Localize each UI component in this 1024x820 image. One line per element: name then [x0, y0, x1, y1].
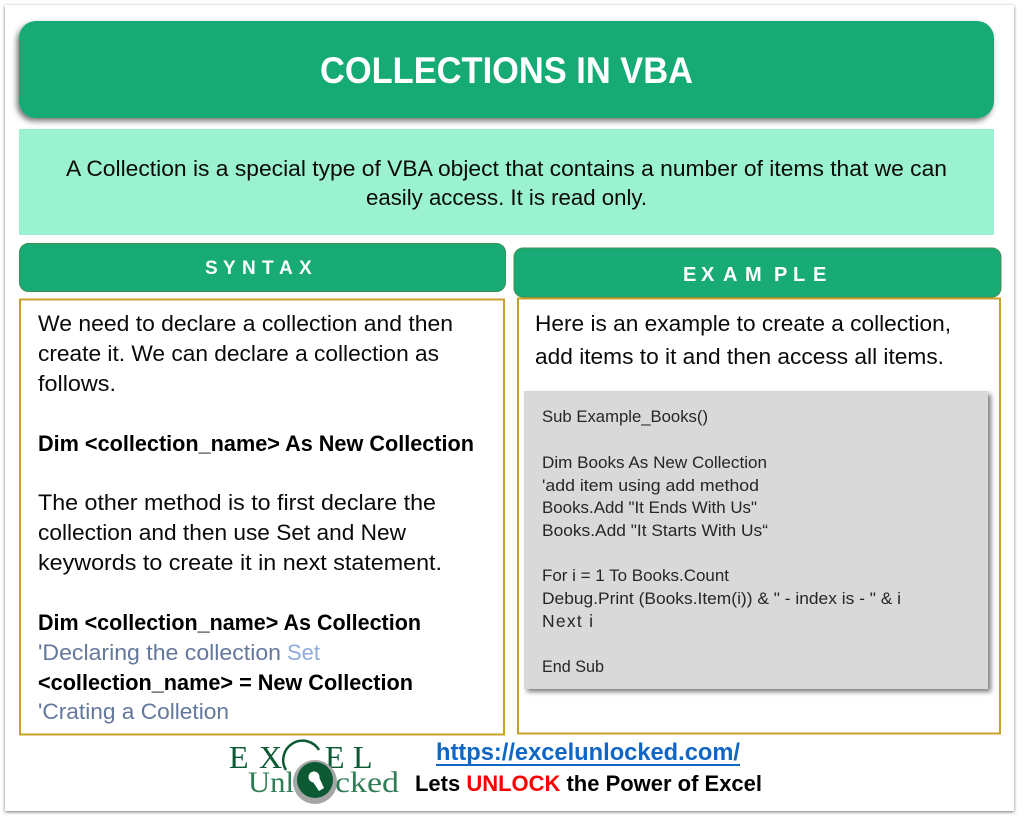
syntax intro text: follows.	[38, 371, 116, 396]
code statements	[38, 610, 421, 724]
panel: example	[518, 298, 1000, 734]
code statements: Dim <collection_name> As Collection	[38, 610, 421, 635]
other method text: collection and then use Set and New	[38, 520, 406, 545]
syntax intro text: create it. We can declare a collection as	[38, 341, 439, 366]
code box: Debug.Print (Books.Item(i)) & " - index is - " & i	[542, 589, 901, 608]
code statements: <collection_name> = New Collection	[38, 670, 413, 695]
code box: End Sub	[542, 657, 604, 676]
code box: Sub Example_Books()	[542, 407, 708, 426]
other method text: The other method is to first declare the	[38, 490, 436, 515]
syntax heading: SYNTAX	[205, 258, 312, 279]
syntax intro text	[38, 311, 453, 396]
intro panel: easily access. It is read only.	[366, 185, 647, 210]
example intro text: add items to it and then access all items.	[535, 344, 944, 369]
code statements: Set	[287, 640, 320, 665]
other method text	[38, 490, 442, 575]
panel: syntax	[20, 300, 504, 734]
icon: padlock	[283, 741, 337, 804]
code box: For i = 1 To Books.Count	[542, 566, 729, 585]
code box: Dim Books As New Collection	[542, 453, 767, 472]
syntax intro text: We need to declare a collection and then	[38, 311, 453, 336]
code box: Books.Add "It Ends With Us"	[542, 498, 757, 517]
code box: Books.Add "It Starts With Us“	[542, 521, 768, 540]
code box: 'add item using add method	[542, 476, 759, 495]
declaration statement: Dim <collection_name> As New Collection	[38, 431, 474, 456]
code box: Next i	[542, 611, 593, 631]
logo: Excel Unlocked: cked	[335, 766, 399, 799]
website link: https://excelunlocked.com/	[436, 739, 740, 766]
intro panel: A Collection is a special type of VBA object that contains a number of items that we can	[66, 156, 947, 181]
example heading: EXAMPLE	[683, 264, 826, 286]
title banner: COLLECTIONS IN VBA	[320, 50, 693, 91]
logo: Excel Unlocked: EXEL	[229, 739, 373, 775]
code statements: 'Crating a Colletion	[38, 699, 229, 724]
syntax heading	[20, 244, 506, 292]
code statements: 'Declaring the collection	[38, 640, 281, 665]
logo: Excel Unlocked: Unl	[248, 766, 294, 799]
logo: Excel Unlocked	[229, 739, 399, 804]
code box	[524, 391, 988, 689]
tagline: Lets UNLOCK the Power of Excel	[415, 771, 762, 796]
example heading	[514, 248, 1001, 297]
example intro text	[535, 311, 951, 369]
intro panel	[19, 129, 994, 235]
title banner	[19, 21, 994, 118]
example intro text: Here is an example to create a collection,	[535, 311, 951, 336]
other method text: keywords to create it in next statement.	[38, 550, 442, 575]
